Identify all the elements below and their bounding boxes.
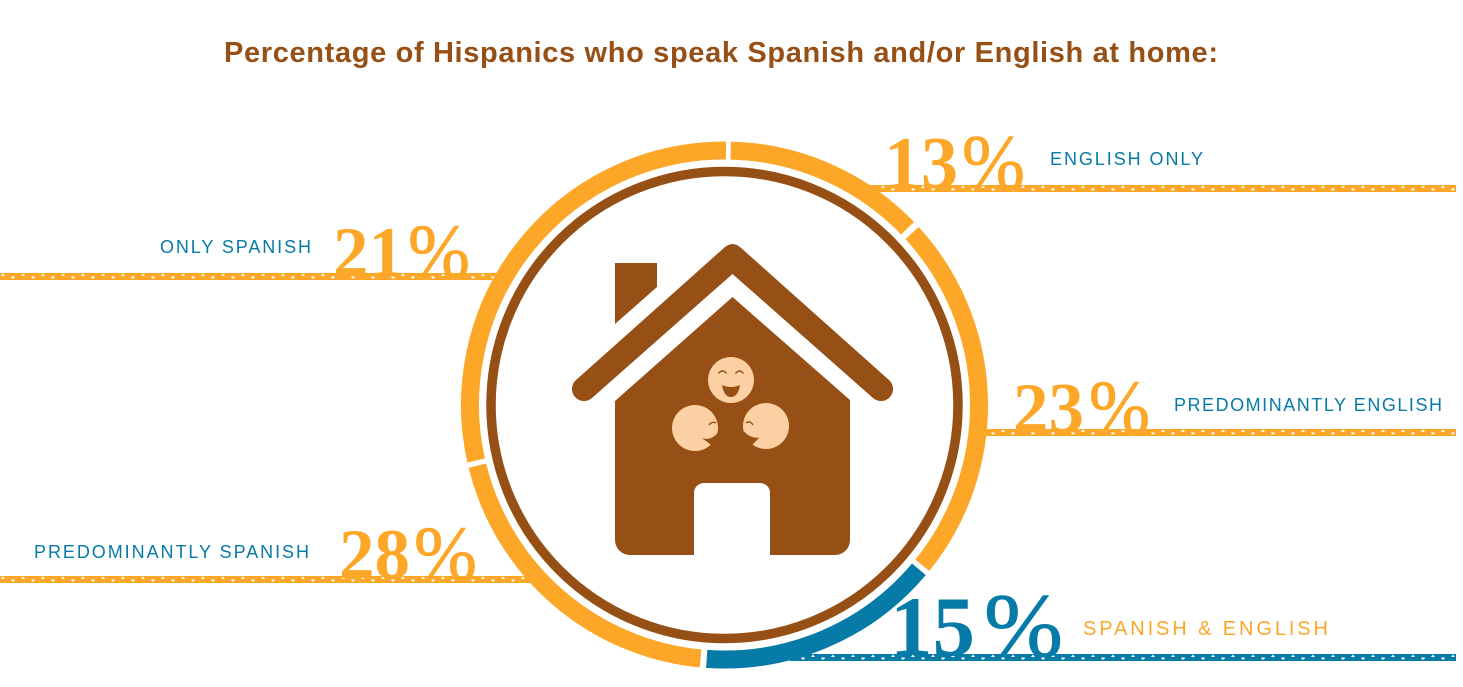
value: 13%: %	[962, 119, 1025, 206]
house body	[615, 297, 850, 555]
label: spanish and english: SPANISH & ENGLISH	[1083, 618, 1328, 640]
value: 15%: %	[984, 577, 1063, 676]
face: top	[708, 357, 754, 403]
value: 21%	[333, 210, 470, 294]
icon: house with three faces	[572, 244, 893, 555]
face: left	[672, 405, 719, 451]
value: 15%	[890, 577, 1063, 676]
leader line: predominantly english	[980, 428, 1456, 436]
segment: lower left	[477, 466, 701, 658]
segment: english only	[731, 151, 908, 228]
segment: spanish and english	[707, 569, 919, 660]
value: 15%: 15	[890, 580, 975, 674]
value: 28%: 28	[339, 516, 410, 594]
label: english only: ENGLISH ONLY	[1050, 149, 1203, 169]
title: Percentage of Hispanics who speak Spanish and/or English at home:	[224, 37, 1218, 69]
label: predominantly english: PREDOMINANTLY ENGLISH	[1174, 395, 1442, 415]
value: 28%	[339, 512, 477, 596]
value: 23%: 23	[1013, 370, 1084, 448]
value: 21%: 21	[333, 214, 404, 292]
label: predominantly spanish: PREDOMINANTLY SPANISH	[34, 542, 309, 562]
value: 23%	[1013, 366, 1150, 450]
value: 13%	[884, 119, 1025, 206]
value: 13%: 13	[884, 123, 958, 205]
chimney	[615, 263, 657, 324]
leader line: only spanish	[0, 272, 500, 280]
inner brown ring	[491, 172, 958, 638]
segment: predominantly english	[912, 233, 979, 565]
face: right	[742, 403, 789, 449]
leader line: english only	[860, 184, 1456, 192]
value: 23%: %	[1089, 366, 1150, 450]
value: 21%: %	[408, 210, 470, 294]
segment: upper left	[470, 150, 726, 460]
label: only spanish: ONLY SPANISH	[160, 237, 311, 257]
leader line: predominantly spanish	[0, 575, 530, 583]
leader line: spanish and english	[790, 653, 1456, 661]
donut ring	[470, 150, 979, 660]
roof	[572, 244, 893, 401]
value: 28%: %	[414, 512, 477, 596]
